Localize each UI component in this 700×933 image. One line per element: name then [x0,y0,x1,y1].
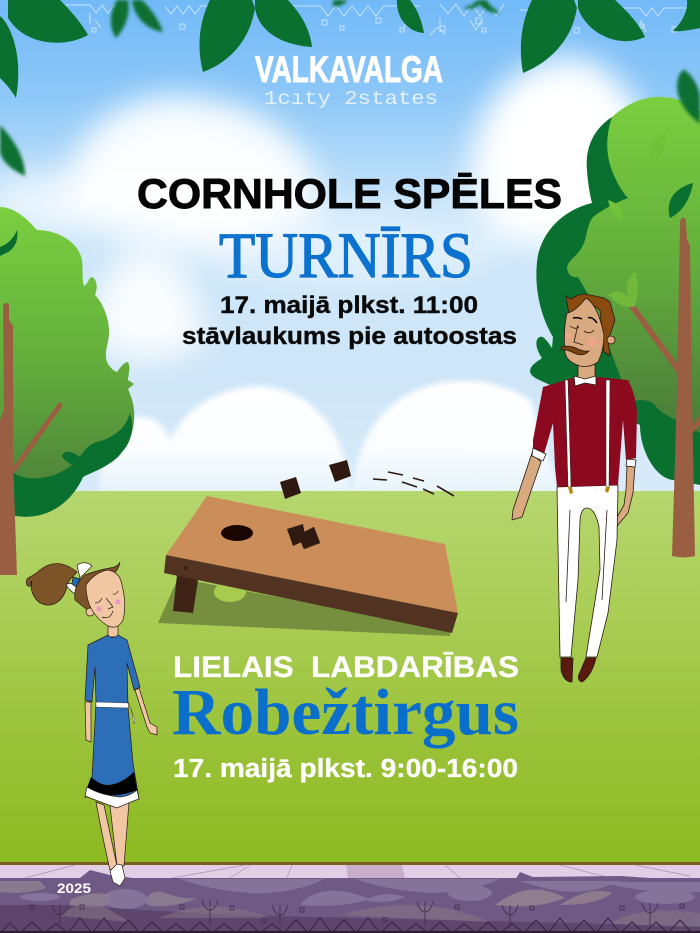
grass [0,491,700,864]
year: 2025 [57,881,92,896]
logo: VALKAVALGA [255,49,443,90]
logo: 1cıty 2states [264,88,438,110]
heading: lielais labdarības: LIELAIS LABDARĪBAS [173,651,519,684]
top leaves [0,0,700,176]
tournament details: 17. maijā plkst. 11:00 [220,292,478,319]
man [512,294,637,682]
market date: 17. maijā plkst. 9:00-16:00 [173,755,518,783]
tournament details [182,292,517,350]
cornhole board [158,460,458,636]
sky [0,0,700,495]
tree leaves [608,133,693,307]
right tree [530,97,700,558]
title: CORNHOLE SPĒLES [137,170,562,217]
pavement [0,862,700,933]
logo [255,49,443,110]
clouds near horizon [100,381,560,495]
motion lines [373,472,454,496]
plant pattern [0,900,692,933]
tournament details: stāvlaukums pie autoostas [182,323,517,350]
heading: robežtirgus: Robežtirgus [172,676,519,749]
heading: turnīrs: TURNĪRS [219,220,473,292]
stones [0,879,700,909]
dark foreground [0,905,700,933]
left tree [0,207,134,575]
decorative top pattern [60,4,698,37]
bean bags [280,460,351,549]
woman [26,562,157,886]
